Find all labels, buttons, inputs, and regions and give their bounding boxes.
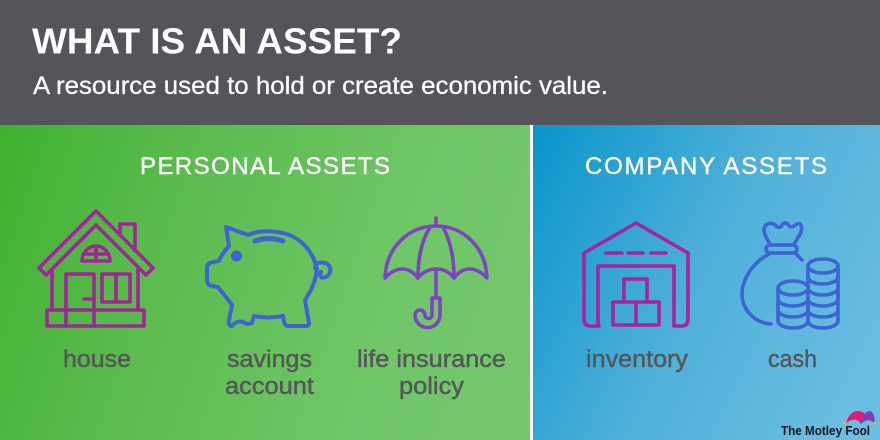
- icon: warehouse: [584, 223, 688, 326]
- icon: money bag and coins: [742, 223, 838, 328]
- title: WHAT IS AN ASSET?: [32, 20, 402, 62]
- label: savings account: savings: [227, 346, 312, 373]
- icon: piggy bank: [207, 227, 330, 326]
- logo: The Motley Fool: The Motley Fool: [781, 423, 870, 438]
- label: life insurance policy: life insurance: [357, 346, 506, 373]
- heading: company assets: COMPANY ASSETS: [585, 153, 827, 180]
- label: life insurance policy: [357, 346, 506, 400]
- icon: jester hat: [844, 411, 876, 424]
- logo: The Motley Fool: [781, 411, 876, 438]
- label: savings account: account: [225, 373, 314, 400]
- subtitle: A resource used to hold or create economic value.: [33, 72, 608, 100]
- panel: personal assets: [0, 125, 530, 440]
- panel: company assets: [533, 125, 880, 440]
- label: savings account: [225, 346, 314, 400]
- label: cash: cash: [768, 346, 817, 373]
- label: inventory: inventory: [586, 346, 688, 373]
- icon: umbrella: [385, 218, 487, 328]
- heading: personal assets: PERSONAL ASSETS: [140, 153, 390, 180]
- label: life insurance policy: policy: [399, 373, 464, 400]
- icon: house: [39, 211, 153, 326]
- panel: header: [0, 0, 880, 125]
- label: house: house: [63, 346, 131, 373]
